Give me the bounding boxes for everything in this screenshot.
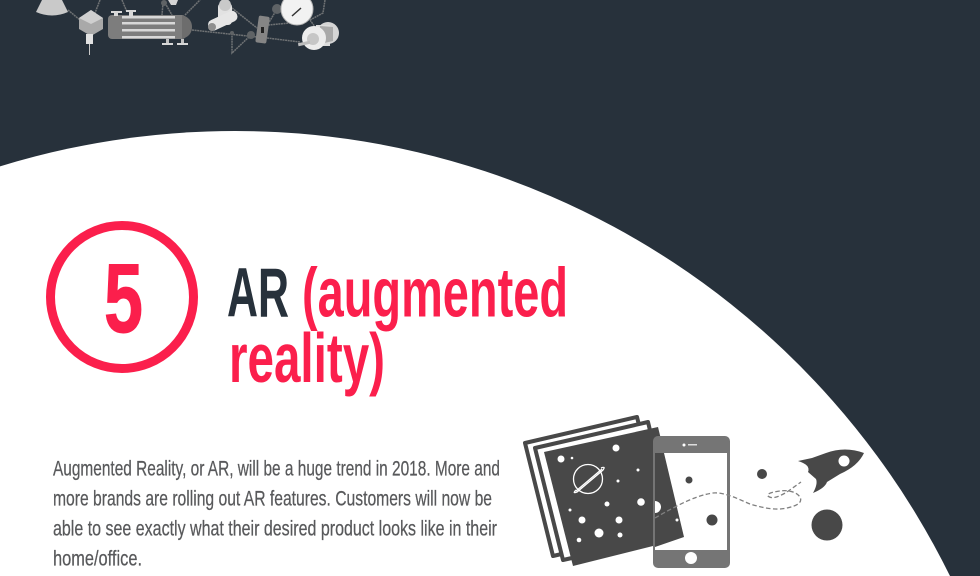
flask — [36, 0, 68, 16]
heading — [227, 254, 568, 397]
icon: number 5 in ring: 5 — [104, 243, 143, 353]
hub nodes — [161, 0, 282, 39]
pipe valve — [206, 0, 239, 32]
white curved panel — [0, 131, 950, 576]
illustration: AR phone, book and rocket — [525, 417, 864, 568]
illustration: industrial machinery network — [36, 0, 339, 55]
heat exchanger — [108, 10, 192, 45]
controller — [255, 15, 270, 44]
pressure gauge — [281, 0, 313, 25]
dashed flight path — [655, 482, 801, 518]
pipe fitting — [168, 0, 178, 5]
phone — [653, 436, 730, 568]
heading: (augmented — [302, 254, 568, 332]
body text: Augmented Reality, or AR, will be a huge trend in 2018. More and — [53, 456, 500, 480]
body text: home/office. — [53, 546, 142, 570]
book pages — [525, 417, 685, 566]
icon: number 5 in ring — [50, 226, 194, 368]
rocket — [798, 450, 864, 493]
body text — [53, 456, 500, 570]
planet — [574, 464, 604, 494]
space dots — [757, 469, 767, 479]
book stars — [558, 444, 645, 542]
heading: AR — [227, 254, 289, 332]
valve block — [79, 10, 103, 55]
electric motor — [298, 22, 339, 50]
body text: able to see exactly what their desired product looks like in their — [53, 516, 497, 540]
heading: reality) — [229, 319, 385, 397]
body text: more brands are rolling out AR features. Customers will now be — [53, 486, 492, 510]
